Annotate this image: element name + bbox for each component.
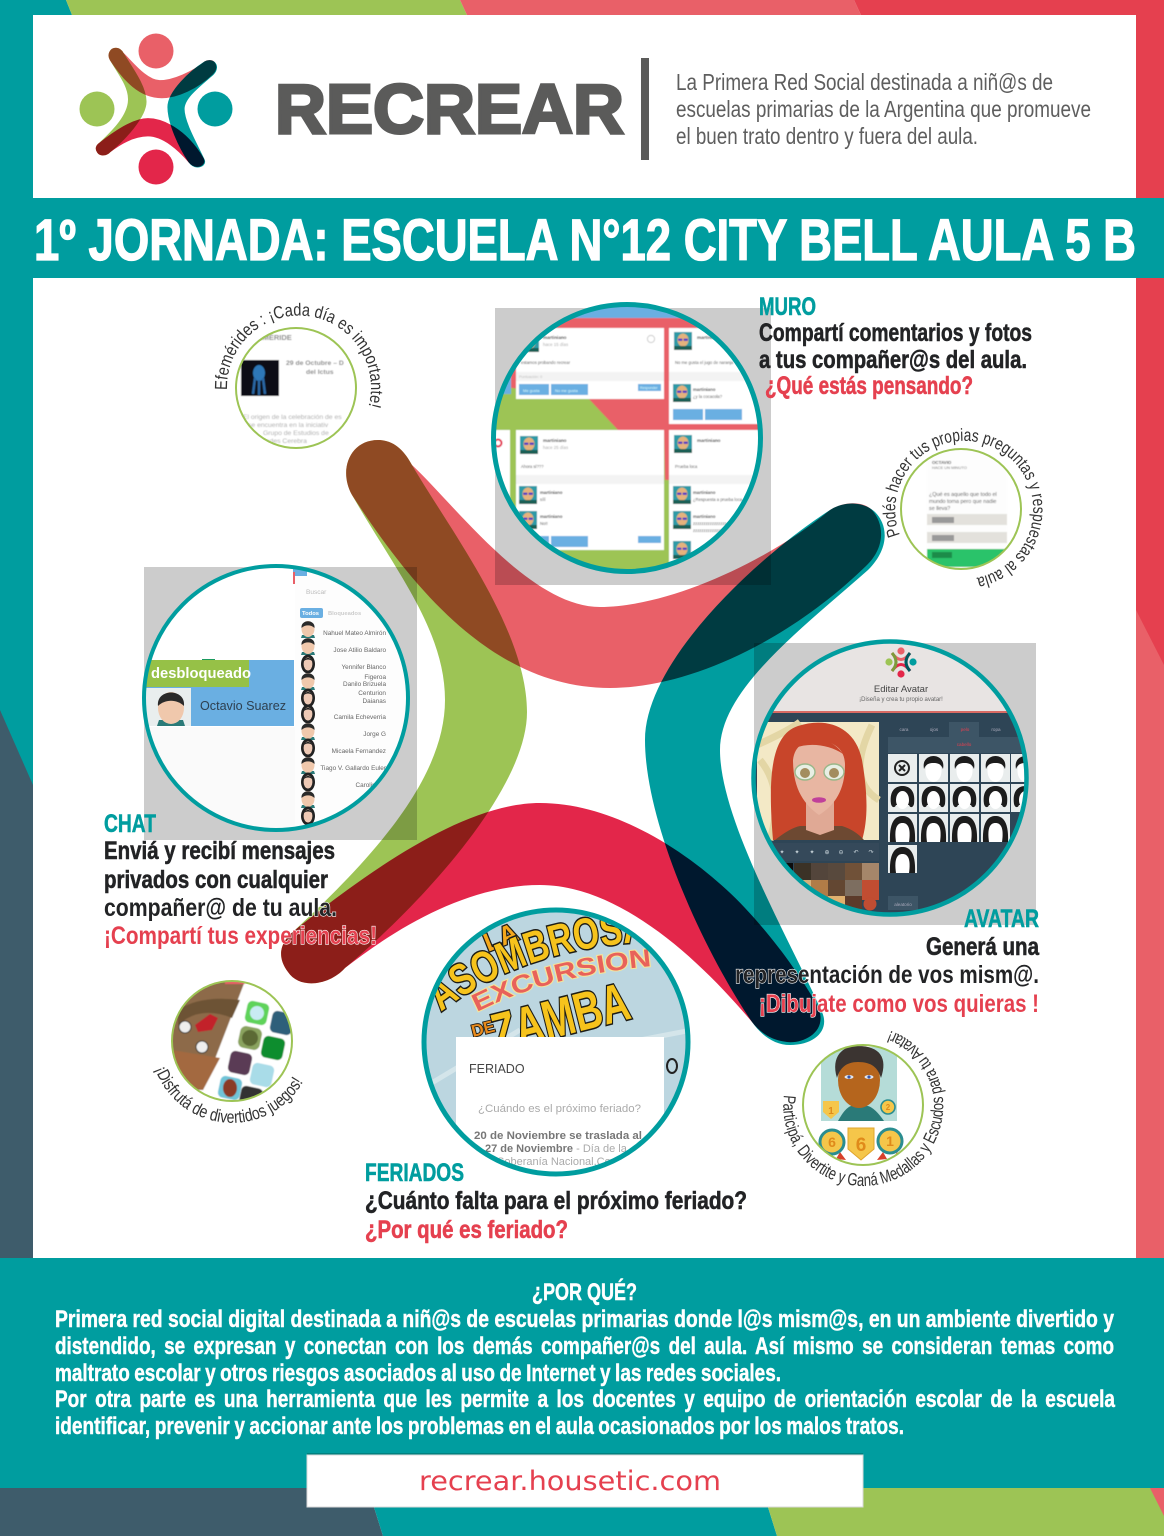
small shield and medal: 1 <box>828 1106 834 1117</box>
avatar option tabs <box>888 722 1035 753</box>
card 3: sííí <box>540 497 546 502</box>
screenshot shadow: chat <box>144 567 417 840</box>
colour swatches: ✦ <box>794 849 800 856</box>
text block: chat <box>104 810 377 950</box>
feriado poster lettering: LA <box>479 917 523 958</box>
feriado poster lettering: DE <box>469 1017 497 1041</box>
card 4: martiniano <box>693 490 716 495</box>
avatar option tabs: cabello <box>957 742 972 747</box>
panel: feriados screenshot circle: 20 de Noviembre se traslada al <box>474 1130 642 1142</box>
card 4: ¿Respuesta a prueba loca <box>693 497 743 502</box>
card 3: martiniano <box>540 514 563 519</box>
chat contact list: Todos <box>302 611 319 617</box>
panel: avatar editor circle: aleatorio <box>894 902 912 907</box>
card 1: hace 15 días <box>543 342 569 347</box>
panel: efemerides mini circle: dades Cerebra <box>262 438 307 445</box>
central four-arm emblem <box>281 440 885 1045</box>
chat contact list: Cristian <box>362 799 384 806</box>
small shield and medal <box>823 1100 895 1119</box>
text block: feriados: ¿Por qué es feriado? <box>365 1216 568 1244</box>
caption: medallas curved: Participá, Divertite y Ganá Medallas y Escudos para tu Avatar! <box>783 1031 946 1186</box>
card 2: No me gusta el jugo de naranja <box>675 360 734 365</box>
text block: feriados <box>365 1159 747 1244</box>
bottom colour strip <box>0 1258 1164 1536</box>
feriado poster lettering: ZAMBA <box>485 972 636 1064</box>
chat contact list: Buscar <box>306 589 327 596</box>
text block: avatar: Generá una <box>926 933 1040 961</box>
text block: muro: ¿Qué estás pensando? <box>765 372 973 400</box>
text block: por qué: maltrato escolar y otros riesgos asociados al uso de Internet y las redes sociales. <box>55 1360 781 1387</box>
arm: teal <box>645 504 885 1045</box>
panel: preguntas mini circle: se lleva? <box>929 506 950 512</box>
logo wordmark: RECREAR <box>275 70 624 148</box>
large badges: 6 <box>856 1135 866 1156</box>
frame: left edge <box>0 0 33 1258</box>
large badges <box>820 1128 903 1160</box>
chat contact list: Tiago V. Gallardo Euler <box>320 765 387 772</box>
card 1: No me gusta <box>555 388 578 393</box>
card 1: martiniano <box>543 335 567 340</box>
panel: efemerides mini circle: del Ictus <box>306 369 334 376</box>
card 4: Prueba loca <box>675 464 698 469</box>
feriado poster lettering: ASOMBROSA <box>434 916 632 1014</box>
panel: avatar editor circle: Editar Avatar <box>874 684 928 695</box>
panel: avatar editor circle <box>750 640 1040 918</box>
text block: avatar <box>735 905 1040 1018</box>
text block: muro: Compartí comentarios y fotos <box>759 319 1032 347</box>
panel: avatar editor circle: ¡Diseña y crea tu propio avatar! <box>859 697 943 703</box>
panel: feriados screenshot circle <box>422 908 690 1176</box>
chat contact list: Figeroa <box>364 674 386 681</box>
text block: por qué: ¿POR QUÉ? <box>532 1278 637 1306</box>
panel: preguntas mini circle: ¿Qué es aquello que todo el <box>929 492 997 498</box>
header tagline: La Primera Red Social destinada a niñ@s de <box>676 69 1053 95</box>
panel: feriados screenshot circle: FERIADO <box>469 1062 525 1076</box>
text block: por qué: identificar, prevenir y accionar ante los problemas en el aula ocasionados por los malos tratos. <box>55 1413 904 1440</box>
panel: feriados screenshot circle: Soberanía Nacional,Conmemora <box>497 1156 658 1168</box>
caption: preguntas curved: Podés hacer tus propias preguntas y respuestas al aula <box>882 428 1043 588</box>
text block: avatar: representación de vos mism@. <box>735 961 1039 989</box>
chat contact list: Centurion <box>358 690 386 697</box>
avatar option tabs: pelo <box>961 727 970 732</box>
colour swatches: ✦ <box>809 849 815 856</box>
caption: juegos curved: ¡Disfrutá de divertidos juegos! <box>153 1067 302 1123</box>
card 3 <box>516 430 664 550</box>
panel: efemerides mini circle: se encuentra en la iniciativ <box>248 422 329 429</box>
arm: pink <box>346 440 881 688</box>
text block: feriados: ¿Cuánto falta para el próximo feriado? <box>365 1187 747 1215</box>
panel: feriados screenshot circle: ¿Cuándo es el próximo feriado? <box>478 1103 641 1115</box>
colour swatches <box>780 850 879 910</box>
chat selected contact <box>140 659 294 726</box>
avatar option tabs: ojos <box>930 727 939 732</box>
colour swatches: ↶ <box>853 849 859 856</box>
feriado poster lettering: EXCURSION <box>470 948 651 1012</box>
colour swatches: ⊖ <box>838 850 844 856</box>
website link box: recrear.housetic.com <box>419 1466 721 1497</box>
game biker <box>179 1014 218 1053</box>
text block: chat: compañer@ de tu aula. <box>104 894 337 922</box>
text block: chat: privados con cualquier <box>104 866 328 894</box>
card 1: Me gusta <box>523 388 540 393</box>
card 3: martiniano <box>543 438 567 443</box>
panel: juegos mini circle <box>172 981 295 1111</box>
caption: efemerides curved: Efemérides : ¡Cada día es importante! <box>214 302 382 408</box>
card 3: hace 25 días <box>543 445 569 450</box>
card 1: Responder <box>640 386 658 390</box>
chat selected contact: Octavio Suarez <box>200 699 286 713</box>
card 2: martiniano <box>693 387 716 392</box>
colour swatches: ↷ <box>868 849 874 856</box>
large badges: 6 <box>828 1134 836 1150</box>
panel: feriados screenshot circle: 27 de Noviembre - Día de la <box>485 1143 628 1155</box>
screenshot shadow: avatar <box>754 643 1036 925</box>
header divider <box>641 58 649 160</box>
panel: preguntas mini circle <box>901 448 1023 570</box>
hair choice grid <box>888 754 1024 873</box>
chat contact list: Nahuel Mateo Almirón <box>323 630 386 637</box>
colour swatches: ⊕ <box>824 850 830 856</box>
card 1 <box>516 328 664 399</box>
card 2: martiniano <box>697 335 721 340</box>
chat contact list: Micaela Fernandez <box>332 748 386 755</box>
screenshot shadow: muro <box>495 308 771 585</box>
chat contact list: Jose Atilio Baldaro <box>333 647 386 654</box>
chat contact list: Jorge G <box>363 731 386 738</box>
text block: avatar: ¡Dibujate como vos quieras ! <box>759 990 1039 1018</box>
header tagline: el buen trato dentro y fuera del aula. <box>676 123 978 149</box>
card 3: martiniano <box>540 490 563 495</box>
website link box <box>307 1453 863 1507</box>
chat contact list <box>300 589 387 826</box>
large badges: 1 <box>886 1133 894 1149</box>
card 4: martiniano <box>693 514 716 519</box>
chat contact list: Bloqueados <box>328 611 361 617</box>
panel: muro screenshot circle <box>486 300 772 580</box>
panel: efemerides mini circle: 29 de Octubre – D <box>286 360 344 367</box>
text block: chat: ¡Compartí tus experiencias! <box>104 922 377 950</box>
chat contact list: Carolina G <box>355 782 386 789</box>
text block: chat: CHAT <box>104 810 156 838</box>
panel: preguntas mini circle: OCTAVIO <box>932 460 952 465</box>
header tagline <box>676 69 1091 149</box>
colour swatches: ✦ <box>779 849 785 856</box>
panel: efemerides mini circle: Grupo de Estudios de <box>263 430 329 437</box>
panel: medallas mini circle <box>803 1045 925 1167</box>
card 2: ¿y la cocacola? <box>693 394 723 399</box>
card 4: martiniano <box>697 438 721 443</box>
card 3: No!! <box>540 521 548 526</box>
panel: efemerides mini circle: El origen de la celebración de es <box>243 414 342 421</box>
chat contact list: Danilo Brizuela <box>343 681 386 688</box>
frame: right edge <box>1136 0 1164 1258</box>
game app icons <box>217 1000 290 1100</box>
chat selected contact: desbloqueado <box>151 666 251 682</box>
arm: green <box>281 440 527 983</box>
card 3: Ahora sí??? <box>521 464 544 469</box>
panel: preguntas mini circle: mundo toma pero que nadie <box>929 499 996 505</box>
small shield and medal: 2 <box>886 1103 891 1112</box>
card 4: zzzzzzzzzzzzzzzz <box>693 521 726 526</box>
panel: chat screenshot circle <box>140 560 420 840</box>
card 2 <box>668 327 758 425</box>
text block: muro <box>759 293 1032 400</box>
arm: red <box>281 803 821 1042</box>
avatar option tabs: cara <box>900 727 909 732</box>
chat contact list: Yennifer Blanco <box>341 664 386 671</box>
avatar portrait <box>757 722 879 840</box>
chat contact list: Camila Echeverria <box>334 714 386 721</box>
text block: por qué <box>55 1278 1116 1440</box>
card 1: Puntuación: 0 <box>519 375 542 379</box>
text block: muro: MURO <box>759 293 816 321</box>
card 4: zzzzzzzzzzzzzzzz <box>693 528 726 533</box>
mini logo <box>885 647 917 678</box>
card 1: estamos probando recrear <box>521 360 571 365</box>
avatar option tabs: ropa <box>991 727 1001 732</box>
text block: feriados: FERIADOS <box>365 1159 464 1187</box>
panel: efemerides mini circle: EFEMÉRIDE <box>248 333 292 342</box>
card 4 <box>668 429 758 562</box>
panel: preguntas mini circle: HACE UN MINUTO <box>932 465 967 470</box>
logo: recrear emblem <box>80 34 232 184</box>
text block: avatar: AVATAR <box>964 905 1039 933</box>
chat contact list: Daianas <box>363 698 386 705</box>
avatar boy <box>821 1046 897 1121</box>
frame: top colour strip <box>0 0 1164 15</box>
panel: efemerides mini circle <box>236 327 358 449</box>
text block: muro: a tus compañer@s del aula. <box>759 346 1027 374</box>
text block: chat: Enviá y recibí mensajes <box>104 837 335 865</box>
